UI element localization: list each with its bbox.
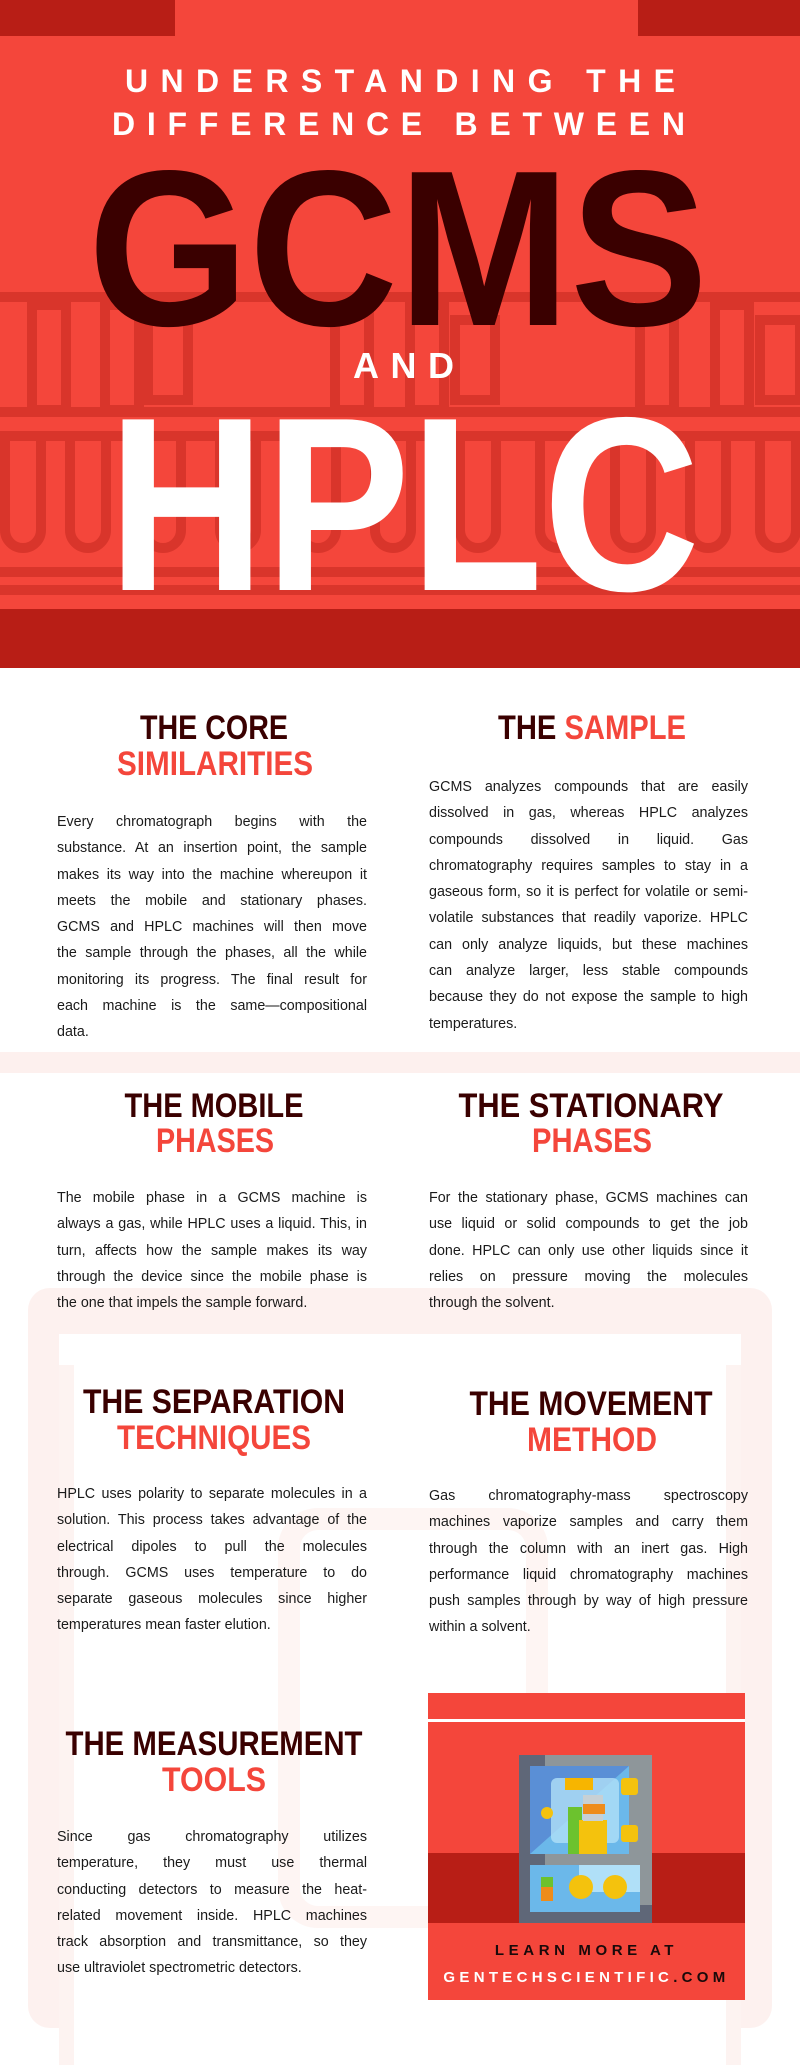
text: measurement tools: temperature, they must use thermal xyxy=(57,1855,367,1871)
header banner xyxy=(0,0,800,668)
text: the sample: gaseous form, so it is perfect for volatile or semi- xyxy=(429,884,748,900)
headings: THE MOVEMENT xyxy=(470,1385,713,1423)
text: stationary phases xyxy=(429,1190,748,1311)
text: stationary phases: For the stationary phase, GCMS machines can xyxy=(429,1190,748,1206)
text: core similarities: monitoring its progress. The final result for xyxy=(57,972,367,988)
divider band xyxy=(0,1052,800,1073)
text: the sample: temperatures. xyxy=(429,1016,517,1032)
headings: THE SEPARATION xyxy=(83,1383,345,1421)
text: mobile phases: the one that impels the sample forward. xyxy=(57,1295,307,1311)
text: separation techniques xyxy=(57,1486,367,1633)
text: mobile phases: The mobile phase in a GCMS machine is xyxy=(57,1190,367,1206)
text: core similarities: Every chromatograph begins with the xyxy=(57,814,367,830)
header banner: UNDERSTANDING THE xyxy=(125,63,675,99)
background frame decoration xyxy=(28,1288,772,2028)
text: stationary phases: use liquid or solid compounds to get the job xyxy=(429,1216,748,1232)
text: the sample: volatile substances that readily vaporize. HPLC xyxy=(429,910,748,926)
text: separation techniques: HPLC uses polarity to separate molecules in a xyxy=(57,1486,367,1502)
text: mobile phases xyxy=(57,1190,367,1311)
headings: METHOD xyxy=(527,1421,657,1459)
text: movement method: push samples through by way of high pressure xyxy=(429,1593,748,1609)
text: core similarities: the sample through the phases, all the while xyxy=(57,945,367,961)
text: core similarities: meets the mobile and stationary phases. xyxy=(57,893,367,909)
text: learn more at: LEARN MORE AT xyxy=(495,1942,678,1959)
text: separation techniques: separate gaseous molecules since higher xyxy=(57,1591,367,1607)
text: core similarities xyxy=(57,814,367,1040)
text: mobile phases: turn, affects how the sample makes its way xyxy=(57,1243,367,1259)
panel: learn more call-to-action xyxy=(428,1693,745,2000)
header banner: HPLC xyxy=(108,365,700,643)
text: stationary phases: relies on pressure moving the molecules xyxy=(429,1269,748,1285)
headings: THE MOBILE xyxy=(124,1087,304,1125)
headings: THE CORE xyxy=(140,709,288,747)
text: measurement tools: Since gas chromatography utilizes xyxy=(57,1829,367,1845)
headings: SIMILARITIES xyxy=(117,745,313,783)
text: movement method: Gas chromatography-mass spectroscopy xyxy=(429,1488,748,1504)
headings: TECHNIQUES xyxy=(117,1419,311,1457)
text: separation techniques: temperatures mean faster elution. xyxy=(57,1617,271,1633)
text: core similarities: makes its way into the machine whereupon it xyxy=(57,867,367,883)
text: the sample xyxy=(429,779,748,1032)
text: separation techniques: electrical dipoles to pull the molecules xyxy=(57,1539,367,1555)
text: measurement tools: track absorption and transmittance, so they xyxy=(57,1934,367,1950)
header banner: AND xyxy=(353,345,454,386)
text: stationary phases: done. HPLC can only use other liquids since it xyxy=(429,1243,748,1259)
text: core similarities: data. xyxy=(57,1024,89,1040)
headings: PHASES xyxy=(532,1122,652,1160)
text: movement method: performance liquid chromatography machines xyxy=(429,1567,748,1583)
headings: TOOLS xyxy=(162,1761,266,1799)
text: measurement tools: related movement inside. HPLC machines xyxy=(57,1908,367,1924)
text: core similarities: GCMS and HPLC machines will then move xyxy=(57,919,367,935)
text: mobile phases: through the device since the mobile phase is xyxy=(57,1269,367,1285)
text: core similarities: each machine is the same—compositional xyxy=(57,998,367,1014)
headings: THE SAMPLE xyxy=(498,709,686,747)
text: movement method: machines vaporize samples and carry them xyxy=(429,1514,748,1530)
text: the sample: can analyze larger, less stable compounds xyxy=(429,963,748,979)
text: movement method: through the column with an inert gas. High xyxy=(429,1541,748,1557)
text: the sample: GCMS analyzes compounds that are easily xyxy=(429,779,748,795)
text: mobile phases: always a gas, while HPLC uses a liquid. This, in xyxy=(57,1216,367,1232)
text: movement method xyxy=(429,1488,748,1635)
text: separation techniques: solution. This process takes advantage of the xyxy=(57,1512,367,1528)
headings: THE STATIONARY xyxy=(458,1087,724,1125)
text: movement method: within a solvent. xyxy=(429,1619,531,1635)
text: the sample: can only analyze liquids, but these machines xyxy=(429,937,748,953)
text: measurement tools: conducting detectors to measure the heat- xyxy=(57,1882,367,1898)
text: measurement tools xyxy=(57,1829,367,1976)
header banner: DIFFERENCE BETWEEN xyxy=(112,106,685,142)
text: the sample: dissolved in gas, whereas HPLC analyzes xyxy=(429,805,748,821)
text: website: GENTECHSCIENTIFIC.COM xyxy=(443,1969,730,1986)
text: the sample: chromatography requires samples to stay in a xyxy=(429,858,748,874)
headings: THE MEASUREMENT xyxy=(66,1725,363,1763)
text: the sample: because they do not expose the sample to high xyxy=(429,989,748,1005)
text: the sample: compounds dissolved in liquid. Gas xyxy=(429,832,748,848)
icon: lab machine xyxy=(519,1755,652,1923)
header banner: GCMS xyxy=(88,125,708,373)
headings: PHASES xyxy=(156,1122,274,1160)
text: core similarities: substance. At an insertion point, the sample xyxy=(57,840,367,856)
text: stationary phases: through the solvent. xyxy=(429,1295,555,1311)
text: separation techniques: through. GCMS uses temperature to do xyxy=(57,1565,367,1581)
text: measurement tools: use ultraviolet spectrometric detectors. xyxy=(57,1960,302,1976)
